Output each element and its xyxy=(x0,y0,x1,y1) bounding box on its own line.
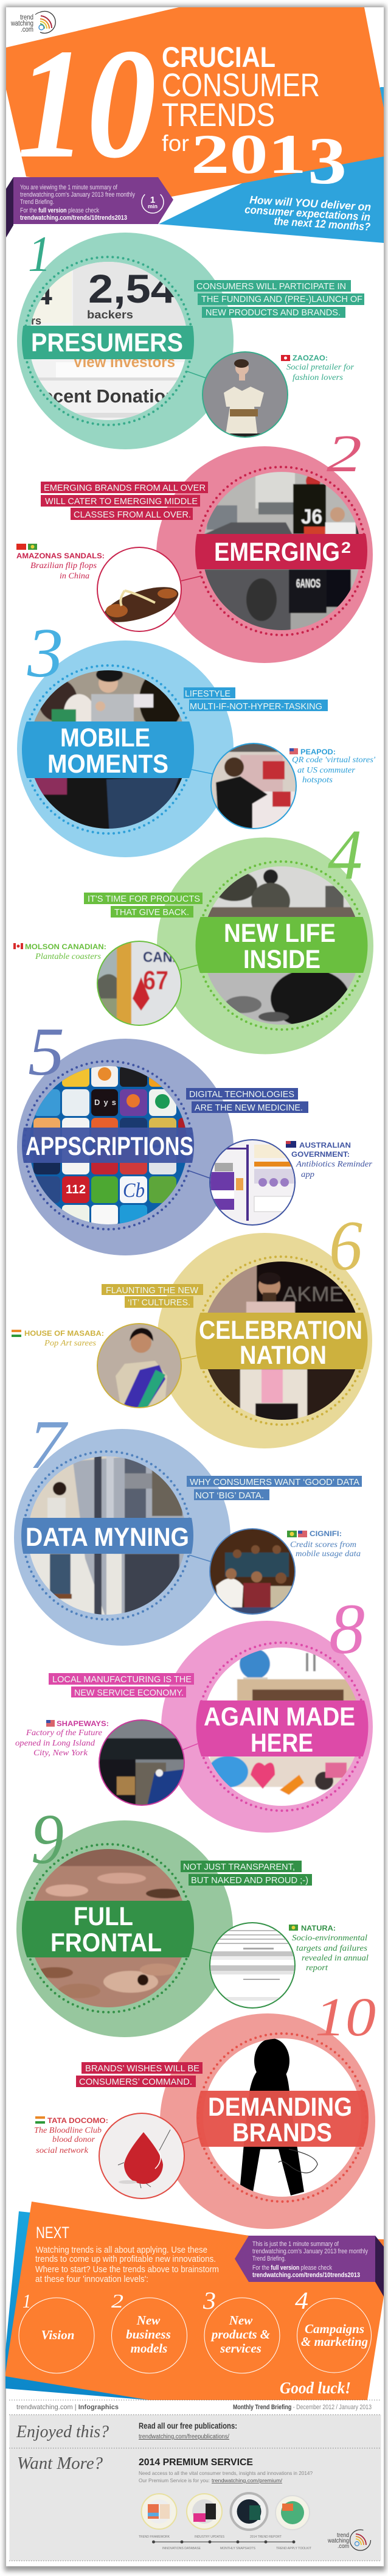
photo: server room xyxy=(30,1456,184,1615)
example caption: natura: targets and failures xyxy=(296,1944,368,1953)
level 4: campaigns and marketing: Campaigns xyxy=(305,2322,364,2336)
dotted ring xyxy=(24,257,192,425)
connector xyxy=(181,1356,196,1359)
question text: How will YOU deliver on xyxy=(249,194,372,213)
tagline: FLAUNTING THE NEW xyxy=(106,1285,199,1296)
next body text: Where to start? Use the trends above to brainstorm xyxy=(35,2265,219,2275)
logo: trendwatching.com xyxy=(10,11,55,33)
tagline xyxy=(102,1284,203,1308)
question text: the next 12 months? xyxy=(274,215,371,233)
level 4: campaigns and marketing: 4 xyxy=(295,2287,308,2314)
tagline: ARE THE NEW MEDICINE. xyxy=(195,1103,303,1113)
tagline: THE FUNDING AND (PRE-)LAUNCH OF xyxy=(201,294,362,304)
next body text: at these four 'innovation levels': xyxy=(35,2275,148,2284)
next body text xyxy=(35,2245,219,2284)
example caption: tata docomo: social network xyxy=(36,2146,89,2155)
trend 6: celebration nation xyxy=(12,1207,372,1448)
title band: MOBILE xyxy=(60,723,150,753)
title band: DATA MYNING xyxy=(26,1523,189,1552)
tagline xyxy=(84,893,203,918)
example caption: zaozao: fashion lovers xyxy=(293,373,344,382)
numeral 4: 4 xyxy=(328,815,362,894)
photo: backers counter: 2,543 xyxy=(88,266,201,311)
title band: AGAIN MADE xyxy=(204,1702,355,1732)
purple info panel: For the full version please check xyxy=(252,2264,332,2272)
example caption: tata docomo: The Bloodline Club xyxy=(34,2126,102,2135)
trend 4: new life inside xyxy=(13,815,373,1055)
example photo: peapod xyxy=(210,743,298,831)
dotted ring xyxy=(198,2034,366,2202)
example photo: cignifi xyxy=(209,1528,296,1616)
blue backing shape xyxy=(5,2211,249,2400)
photo: car showroom xyxy=(204,472,359,630)
level 2: new business models: New xyxy=(136,2313,161,2328)
trend 5: appscriptions xyxy=(17,1014,373,1255)
level 3: new products and services: services xyxy=(220,2341,262,2356)
title: crucial consumer trends for 2013: TRENDS xyxy=(162,97,275,133)
logo: trendwatching.com: watching xyxy=(10,20,33,27)
premium service: trendwatching.com/premium/ xyxy=(212,2477,283,2483)
photo: backers counter: 4 xyxy=(35,277,52,311)
connector xyxy=(189,1555,211,1562)
purple info panel xyxy=(13,177,173,224)
trend 10: demanding brands xyxy=(34,1987,376,2229)
example caption: shapeways: Factory of the Future xyxy=(26,1728,102,1738)
footer source line: trendwatching.com | Infographics xyxy=(16,2404,119,2411)
example photo: molson canadian xyxy=(97,941,182,1026)
tagline: CONSUMERS’ COMMAND. xyxy=(79,2077,192,2087)
example caption: molson canadian: MOLSON CANADIAN: xyxy=(25,942,106,951)
logo: trendwatching.com footer: watching xyxy=(327,2537,349,2544)
example caption: tata docomo xyxy=(34,2116,108,2155)
dotted ring xyxy=(24,665,192,834)
dotted ring xyxy=(198,467,365,635)
footer xyxy=(9,2400,381,2561)
tagline xyxy=(184,687,328,712)
example caption: peapod: at US commuter xyxy=(297,766,356,775)
next body text: Watching trends is all about applying. Use these xyxy=(36,2245,207,2255)
tagline: MULTI-IF-NOT-HYPER-TASKING xyxy=(190,701,322,712)
title band xyxy=(193,534,370,569)
example caption: amazonas sandals: Brazilian flip flops xyxy=(30,561,97,570)
numeral 6: 6 xyxy=(329,1207,362,1285)
example caption: australian government: Antibiotics Reminder xyxy=(296,1160,373,1169)
example caption: natura: revealed in annual xyxy=(302,1954,369,1963)
tagline: CLASSES FROM ALL OVER. xyxy=(74,510,191,520)
logo: trendwatching.com footer: .com xyxy=(338,2543,349,2550)
example caption: peapod: QR code 'virtual stores' xyxy=(292,756,376,765)
title band xyxy=(18,721,198,779)
big circle xyxy=(157,838,373,1055)
example caption: natura xyxy=(289,1924,369,1973)
example caption: amazonas sandals xyxy=(16,544,105,581)
title: crucial consumer trends for 2013 xyxy=(162,41,347,198)
footer source line: Monthly Trend Briefing - December 2012 / January 2013 xyxy=(233,2404,372,2411)
example caption: shapeways: opened in Long Island xyxy=(15,1739,95,1748)
example caption: house of masaba xyxy=(12,1329,104,1348)
purple info panel: You are viewing the 1 minute summary of xyxy=(20,184,118,191)
purple info panel: trendwatching.com/trends/10trends2013 xyxy=(252,2272,360,2279)
photo: app icon grid: Dys xyxy=(94,1098,116,1107)
tagline: LIFESTYLE xyxy=(185,689,230,699)
connector xyxy=(182,1744,198,1750)
premium service: Our Premium Service is for you: xyxy=(139,2477,210,2483)
example caption: australian government: AUSTRALIAN xyxy=(299,1141,351,1149)
example caption: peapod: hotspots xyxy=(302,776,333,785)
header banner xyxy=(6,7,384,243)
title band: PRESUMERS xyxy=(31,328,183,357)
big circle xyxy=(161,1621,373,1833)
tagline: LOCAL MANUFACTURING IS THE xyxy=(52,1674,192,1685)
premium timeline: TREND FRAMEWORK xyxy=(139,2535,170,2539)
photo: car showroom: 6ANOS xyxy=(296,577,320,591)
tagline: DIGITAL TECHNOLOGIES xyxy=(189,1089,294,1100)
title: crucial consumer trends for 2013: CRUCIAL xyxy=(162,41,275,73)
example caption: tata docomo: TATA DOCOMO: xyxy=(47,2116,108,2125)
level 1: vision: 1 xyxy=(23,2290,31,2312)
example caption: shapeways xyxy=(15,1719,109,1758)
purple info panel: This is just the 1 minute summary of xyxy=(252,2241,339,2248)
numeral 7: 7 xyxy=(29,1406,68,1483)
title band: EMERGING xyxy=(214,538,340,567)
example caption: zaozao xyxy=(281,354,355,382)
trend 2: emerging squared xyxy=(16,424,373,663)
blue header shape xyxy=(159,87,384,243)
title band: NATION xyxy=(240,1341,327,1370)
tagline: BRANDS’ WISHES WILL BE xyxy=(85,2063,199,2074)
free publications: trendwatching.com/freepublications/ xyxy=(139,2434,229,2440)
title band: CELEBRATION xyxy=(199,1316,362,1345)
photo: car showroom: J6 xyxy=(301,505,322,528)
icon: 1 minute timer: 1 xyxy=(150,195,155,205)
purple info panel xyxy=(235,2236,375,2282)
title: crucial consumer trends for 2013: for xyxy=(162,131,189,156)
purple info panel: For the full version please check xyxy=(20,207,99,214)
free publications: Read all our free publications: xyxy=(139,2421,237,2430)
photo: backers counter: View Investors xyxy=(73,354,175,371)
connector xyxy=(189,1171,210,1178)
good luck: Good luck! xyxy=(280,2379,351,2397)
numeral 8: 8 xyxy=(329,1589,365,1669)
photo: app icon grid xyxy=(31,1066,187,1224)
photo: silhouette xyxy=(208,2038,356,2197)
premium timeline: TREND APPLY TOOLKIT xyxy=(276,2547,312,2550)
example caption: shapeways: SHAPEWAYS: xyxy=(57,1719,109,1728)
tagline: NEW PRODUCTS AND BRANDS. xyxy=(206,307,341,318)
question text xyxy=(244,194,372,233)
example caption: australian government xyxy=(286,1141,373,1179)
example caption: zaozao: ZAOZAO: xyxy=(293,354,328,362)
trend 7: data myning xyxy=(14,1406,362,1646)
photo: app icon grid: Cb xyxy=(123,1179,145,1202)
example caption: house of masaba: HOUSE OF MASABA: xyxy=(24,1329,104,1338)
logo: trendwatching.com footer: trend xyxy=(337,2532,349,2539)
title band xyxy=(193,1700,371,1758)
trend 8: again made here xyxy=(15,1589,373,1833)
example caption: cignifi xyxy=(287,1529,361,1559)
example caption: natura: report xyxy=(306,1964,328,1973)
numeral 1: 1 xyxy=(28,226,51,283)
level 2: new business models: business xyxy=(126,2327,171,2342)
next body text: trends to come up with profitable new innovations. xyxy=(35,2255,216,2264)
title band: MOMENTS xyxy=(47,749,168,779)
purple info panel: Trend Briefing. xyxy=(20,198,54,206)
title band xyxy=(18,1128,198,1163)
example caption: molson canadian xyxy=(13,942,106,961)
logo: trendwatching.com: .com xyxy=(21,26,33,33)
tagline xyxy=(181,1861,312,1886)
connector xyxy=(187,371,206,378)
logo: trendwatching.com: trend xyxy=(20,14,33,21)
photo: backers counter xyxy=(30,262,186,420)
tagline: CONSUMERS WILL PARTICIPATE IN xyxy=(196,281,346,292)
photo: backers counter: backers xyxy=(87,309,133,321)
photo: fashion show xyxy=(208,1262,356,1420)
level 3: new products and services: products & xyxy=(210,2327,271,2342)
example caption: cignifi: Credit scores from xyxy=(290,1540,356,1549)
orange header shape xyxy=(6,7,384,197)
title band: HERE xyxy=(251,1728,313,1758)
purple fold xyxy=(6,177,13,237)
tagline: NOT JUST TRANSPARENT, xyxy=(183,1862,295,1872)
numeral 2: 2 xyxy=(327,424,362,483)
footer background xyxy=(10,2415,381,2561)
connector xyxy=(181,576,201,581)
tagline xyxy=(187,1476,362,1501)
purple info panel: Trend Briefing. xyxy=(252,2255,286,2262)
dotted ring xyxy=(24,1844,192,2012)
premium timeline: INDUSTRY UPDATES xyxy=(195,2535,224,2539)
dotted ring xyxy=(23,1451,191,1620)
big circle xyxy=(17,1039,234,1255)
next panel xyxy=(5,2202,384,2400)
logo: trendwatching.com footer xyxy=(327,2530,371,2550)
free publications xyxy=(139,2421,237,2440)
premium service: 2014 PREMIUM SERVICE xyxy=(139,2457,253,2468)
title band: FRONTAL xyxy=(50,1928,162,1957)
big circle xyxy=(16,1820,233,2037)
level 2: new business models xyxy=(111,2290,187,2373)
example photo: house of masaba xyxy=(97,1323,182,1413)
tagline xyxy=(76,2062,203,2087)
photo: backers counter: rs xyxy=(31,315,41,327)
example photo: molson canadian: 67 xyxy=(143,966,168,995)
title: crucial consumer trends for 2013: 201 xyxy=(191,123,307,185)
example caption: tata docomo: blood donor xyxy=(52,2135,95,2144)
example caption: peapod xyxy=(289,748,376,785)
tagline: ‘IT’ CULTURES. xyxy=(128,1297,190,1308)
example caption: natura: NATURA: xyxy=(301,1924,336,1932)
premium timeline: INNOVATIONS DATABASE xyxy=(162,2547,201,2550)
photo: app icon grid: 112 xyxy=(66,1183,86,1196)
big circle xyxy=(160,2013,375,2229)
next heading: NEXT xyxy=(36,2223,69,2242)
numeral 3: 3 xyxy=(27,614,63,692)
photo: soldiers planting xyxy=(207,866,356,1025)
level 3: new products and services: 3 xyxy=(203,2287,216,2314)
example photo: tata docomo xyxy=(99,2113,185,2199)
purple info panel: trendwatching.com's January 2013 free monthly xyxy=(20,191,135,198)
big circle xyxy=(14,1429,230,1646)
example caption: natura: Socio-environmental xyxy=(292,1934,367,1943)
example caption: cignifi: mobile usage data xyxy=(296,1549,361,1559)
premium service xyxy=(139,2457,313,2483)
level 3: new products and services: New xyxy=(229,2313,253,2328)
numeral 10: 10 xyxy=(315,1987,376,2048)
title band: APPSCRIPTIONS xyxy=(26,1132,193,1161)
dotted ring xyxy=(198,862,365,1030)
level 1: vision: Vision xyxy=(41,2328,74,2342)
premium timeline: MONTHLY SNAPSHOTS xyxy=(220,2547,255,2550)
icon: 1 minute timer: min xyxy=(148,203,158,209)
title band xyxy=(193,2091,371,2147)
example caption: shapeways: City, New York xyxy=(33,1749,88,1758)
example caption: zaozao: Social pretailer for xyxy=(286,363,355,372)
tagline: NEW SERVICE ECONOMY. xyxy=(74,1688,184,1698)
tagline: EMERGING BRANDS FROM ALL OVER xyxy=(44,483,206,493)
connector xyxy=(192,770,212,774)
enjoyed this: Enjoyed this? xyxy=(16,2423,109,2441)
trend 1: presumers xyxy=(17,226,364,449)
example photo: molson canadian: CANA xyxy=(143,949,182,966)
example caption: cignifi: CIGNIFI: xyxy=(310,1529,342,1538)
title band: DEMANDING xyxy=(208,2093,352,2122)
title band xyxy=(193,917,370,974)
tagline: WHY CONSUMERS WANT ‘GOOD’ DATA xyxy=(190,1477,359,1487)
example photo: zaozao xyxy=(201,350,289,441)
photo: 3d printer xyxy=(207,1648,356,1806)
level 3: new products and services xyxy=(203,2287,280,2373)
example caption: amazonas sandals: AMAZONAS SANDALS: xyxy=(16,552,105,560)
premium timeline: 2014 TREND REPORT xyxy=(250,2535,282,2539)
title band: BRANDS xyxy=(232,2118,332,2147)
level 4: campaigns and marketing: & marketing xyxy=(301,2334,368,2349)
level 2: new business models: 2 xyxy=(111,2290,123,2312)
title band xyxy=(18,1901,198,1957)
example caption: australian government: app xyxy=(301,1170,314,1179)
question text: consumer expectations in xyxy=(244,203,371,223)
title: crucial consumer trends for 2013: CONSUMER xyxy=(162,67,320,104)
tagline: THAT GIVE BACK. xyxy=(114,907,189,918)
tagline: WILL CATER TO EMERGING MIDDLE xyxy=(45,496,198,507)
connector xyxy=(192,1948,211,1953)
example photo: australian government app xyxy=(209,1139,296,1226)
example caption: molson canadian: Plantable coasters xyxy=(35,952,102,961)
title band xyxy=(193,1313,370,1370)
title band: INSIDE xyxy=(243,945,320,974)
trend 9: full frontal xyxy=(16,1799,369,2037)
icon: 1 minute timer xyxy=(137,187,168,217)
purple fold xyxy=(375,2236,384,2297)
level 1: vision xyxy=(19,2290,94,2373)
footer source line xyxy=(16,2404,372,2411)
example caption: australian government: GOVERNMENT: xyxy=(291,1150,350,1159)
numeral 5: 5 xyxy=(28,1014,64,1090)
tagline: IT'S TIME FOR PRODUCTS xyxy=(88,894,200,904)
numeral 9: 9 xyxy=(31,1799,64,1879)
dotted dividers xyxy=(9,2400,381,2561)
level 4: campaigns and marketing xyxy=(295,2287,371,2373)
title band: 2 xyxy=(341,539,351,556)
photo: crowd xyxy=(34,1849,182,2007)
connector xyxy=(180,965,198,970)
tagline xyxy=(41,482,208,520)
want more: Want More? xyxy=(17,2454,103,2473)
title: crucial consumer trends for 2013: 3 xyxy=(308,124,347,198)
tagline xyxy=(49,1673,194,1698)
tagline xyxy=(186,1088,308,1113)
photo: fashion show: AKME xyxy=(283,1283,344,1306)
orange panel xyxy=(5,2202,384,2400)
big circle xyxy=(157,1233,372,1448)
example caption: amazonas sandals: in China xyxy=(60,572,89,581)
title band: NEW LIFE xyxy=(224,919,336,948)
dotted ring xyxy=(198,1257,365,1425)
level 2: new business models: models xyxy=(131,2341,167,2356)
example photo: amazonas sandals xyxy=(97,547,182,633)
connector xyxy=(182,2138,199,2143)
dotted ring xyxy=(198,1643,365,1811)
dotted ring xyxy=(24,1061,192,1229)
title band: FULL xyxy=(74,1902,133,1931)
photo: backers counter: Recent Donations xyxy=(29,385,187,407)
big circle xyxy=(17,233,234,449)
example photo: natura report xyxy=(209,1922,296,2009)
premium timeline xyxy=(139,2535,312,2550)
example caption: house of masaba: Pop Art sarees xyxy=(44,1339,97,1348)
title numeral 10: 10 xyxy=(17,16,156,191)
photo: people on mobile devices xyxy=(34,670,182,829)
tagline: NOT ‘BIG’ DATA. xyxy=(195,1490,264,1501)
premium service: Need access to all the vital consumer trends, insights and innovations in 2014? xyxy=(139,2470,313,2476)
tagline: BUT NAKED AND PROUD ;-) xyxy=(191,1875,308,1886)
big circle xyxy=(156,446,373,663)
tagline xyxy=(194,280,364,318)
big circle xyxy=(17,640,234,857)
trend 3: mobile moments xyxy=(17,614,376,857)
purple info panel: trendwatching.com/trends/10trends2013 xyxy=(20,214,127,222)
example photo: shapeways xyxy=(99,1719,189,1806)
premium product thumbnails xyxy=(141,2493,310,2530)
example caption: peapod: PEAPOD: xyxy=(300,748,336,756)
